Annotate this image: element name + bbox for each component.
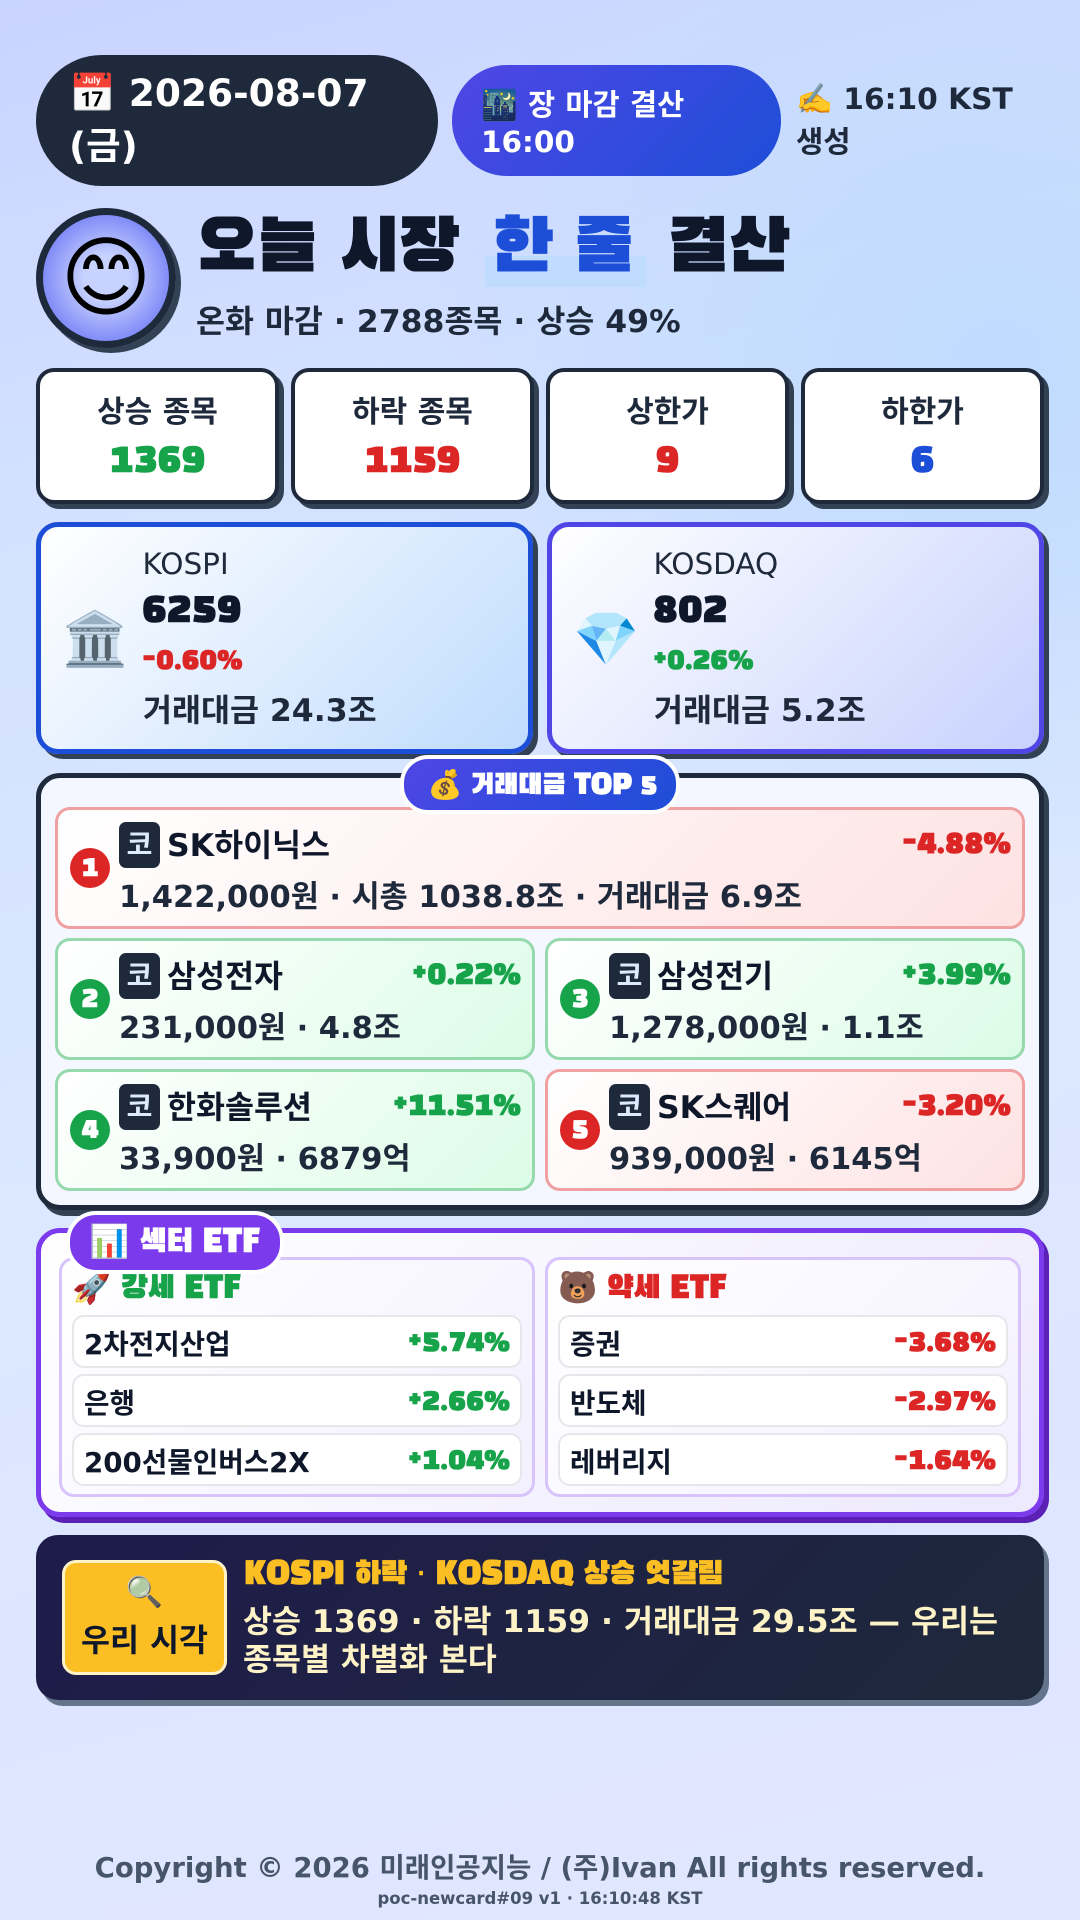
row 4: Hanwha Solutions <box>55 1069 535 1191</box>
body text <box>243 1604 998 1678</box>
panel: our view <box>36 1535 1044 1700</box>
body text: 상승 1369 · 하락 1159 · 거래대금 29.5조 — 우리는 <box>243 1604 998 1640</box>
panel: turnover top 5 <box>36 773 1044 1210</box>
market close pill <box>452 65 781 176</box>
stat: upper limit: 9 <box>656 441 680 481</box>
row 4: Hanwha Solutions: 4 <box>82 1116 98 1144</box>
KOSPI turnover: 거래대금 24.3조 <box>143 693 377 729</box>
panel: KOSDAQ <box>547 522 1044 754</box>
stat: rising: 상승 종목 <box>97 395 218 430</box>
generated time: ✍️ 16:10 KST 생성 <box>796 82 1013 160</box>
row 4: Hanwha Solutions: 33,900원 · 6879억 <box>119 1142 411 1177</box>
stat: upper limit <box>546 368 789 504</box>
stat: lower limit <box>801 368 1044 504</box>
heading pill: turnover top 5 <box>400 755 680 814</box>
row 5: SK Square: 5 <box>572 1116 588 1144</box>
row 5: SK Square <box>545 1069 1025 1191</box>
ETF: secondary battery: +5.74% <box>408 1328 510 1358</box>
ETF: leverage <box>558 1433 1008 1486</box>
our view badge <box>62 1560 227 1675</box>
stat: rising <box>36 368 279 504</box>
weak ETF card <box>545 1257 1021 1497</box>
row 2: Samsung Electronics: 231,000원 · 4.8조 <box>119 1011 401 1046</box>
ETF: semiconductors: 반도체 <box>570 1386 646 1420</box>
ETF: banks: +2.66% <box>408 1386 510 1416</box>
row 1: SK hynix: 1 <box>82 854 98 882</box>
icon: magnifier: 🔍 <box>126 1575 163 1610</box>
ETF: semiconductors: -2.97% <box>894 1386 996 1416</box>
stat: falling: 하락 종목 <box>352 395 473 430</box>
body text: 종목별 차별화 본다 <box>243 1642 497 1678</box>
ETF: leverage: 레버리지 <box>570 1446 672 1478</box>
badge label: 우리 시각 <box>81 1623 208 1659</box>
KOSPI label: KOSPI <box>142 547 229 581</box>
stat: falling <box>291 368 534 504</box>
strong ETF card <box>59 1257 535 1497</box>
stat: lower limit: 하한가 <box>881 395 964 430</box>
row 5: SK Square: SK스퀘어 <box>657 1090 791 1126</box>
row 5: SK Square: -3.20% <box>902 1090 1011 1122</box>
heading pill: turnover top 5: 💰 거래대금 TOP 5 <box>428 772 657 800</box>
row 4: Hanwha Solutions: +11.51% <box>393 1090 521 1122</box>
ETF: securities <box>558 1315 1008 1368</box>
ETF: securities: 증권 <box>570 1328 621 1360</box>
row 5: SK Square: 코 <box>617 1090 642 1123</box>
market close pill: 🌃 장 마감 결산 16:00 <box>481 88 684 159</box>
panel: sector ETF <box>36 1228 1044 1517</box>
ETF: banks <box>72 1374 522 1427</box>
icon: gem: 💎 <box>573 609 639 670</box>
KOSPI change: -0.60% <box>142 647 243 676</box>
footer build tag: poc-newcard#09 v1 · 16:10:48 KST <box>377 1889 703 1908</box>
ETF: leverage: -1.64% <box>894 1446 996 1476</box>
row 1: SK hynix <box>55 807 1025 929</box>
row 3: Samsung Electro-Mechanics: 삼성전기 <box>657 959 773 995</box>
panel: KOSPI <box>36 522 533 754</box>
KOSDAQ turnover: 거래대금 5.2조 <box>654 693 866 729</box>
footer copyright: Copyright © 2026 미래인공지능 / (주)Ivan All rights reserved. <box>95 1852 985 1884</box>
row 2: Samsung Electronics <box>55 938 535 1060</box>
row 3: Samsung Electro-Mechanics: 3 <box>572 985 588 1013</box>
KOSPI value: 6259 <box>142 589 242 631</box>
title highlight <box>485 256 646 287</box>
KOSDAQ label: KOSDAQ <box>654 547 778 581</box>
row 1: SK hynix: 코 <box>127 828 152 861</box>
ETF: 200 futures inverse: +1.04% <box>408 1446 510 1476</box>
icon: bank: 🏛️ <box>62 609 128 670</box>
stat: lower limit: 6 <box>910 441 934 481</box>
weak ETF heading: 🐻 약세 ETF <box>558 1273 727 1305</box>
row 3: Samsung Electro-Mechanics <box>545 938 1025 1060</box>
stat: falling: 1159 <box>364 441 460 481</box>
ETF: secondary battery <box>72 1315 522 1368</box>
KOSDAQ value: 802 <box>653 589 728 631</box>
subtitle: 온화 마감 · 2788종목 · 상승 49% <box>196 304 681 340</box>
date pill <box>36 55 438 186</box>
date pill: 📅 2026-08-07 (금) <box>69 71 369 168</box>
row 3: Samsung Electro-Mechanics: 1,278,000원 · 1.1조 <box>609 1011 924 1046</box>
row 5: SK Square: 939,000원 · 6145억 <box>609 1142 922 1177</box>
row 2: Samsung Electronics: 2 <box>82 985 98 1013</box>
row 4: Hanwha Solutions: 코 <box>127 1090 152 1123</box>
row 2: Samsung Electronics: 삼성전자 <box>167 959 283 995</box>
row 2: Samsung Electronics: 코 <box>127 959 152 992</box>
ETF: 200 futures inverse: 200선물인버스2X <box>84 1446 310 1478</box>
stat: rising: 1369 <box>110 441 206 481</box>
ETF: banks: 은행 <box>84 1386 135 1420</box>
title: 오늘 시장 한 줄 결산 <box>197 215 789 287</box>
row 3: Samsung Electro-Mechanics: +3.99% <box>902 959 1011 991</box>
row 1: SK hynix: 1,422,000원 · 시총 1038.8조 · 거래대금 6.9조 <box>119 880 802 915</box>
headline: KOSPI 하락 · KOSDAQ 상승 엇갈림 <box>244 1559 723 1591</box>
avatar: smile icon <box>36 208 176 348</box>
ETF: semiconductors <box>558 1374 1008 1427</box>
row 1: SK hynix: SK하이닉스 <box>167 828 330 864</box>
stat: upper limit: 상한가 <box>626 395 709 430</box>
row 4: Hanwha Solutions: 한화솔루션 <box>167 1090 312 1126</box>
avatar: smile icon: 😊 <box>60 226 152 329</box>
row 3: Samsung Electro-Mechanics: 코 <box>617 959 642 992</box>
ETF: securities: -3.68% <box>894 1328 996 1358</box>
ETF: secondary battery: 2차전지산업 <box>84 1328 231 1360</box>
row 1: SK hynix: -4.88% <box>902 828 1011 860</box>
heading pill: sector ETF <box>66 1211 284 1274</box>
strong ETF heading: 🚀 강세 ETF <box>72 1273 241 1305</box>
ETF: 200 futures inverse <box>72 1433 522 1486</box>
KOSDAQ change: +0.26% <box>653 647 754 676</box>
heading pill: sector ETF: 📊 섹터 ETF <box>90 1227 260 1259</box>
row 2: Samsung Electronics: +0.22% <box>412 959 521 991</box>
